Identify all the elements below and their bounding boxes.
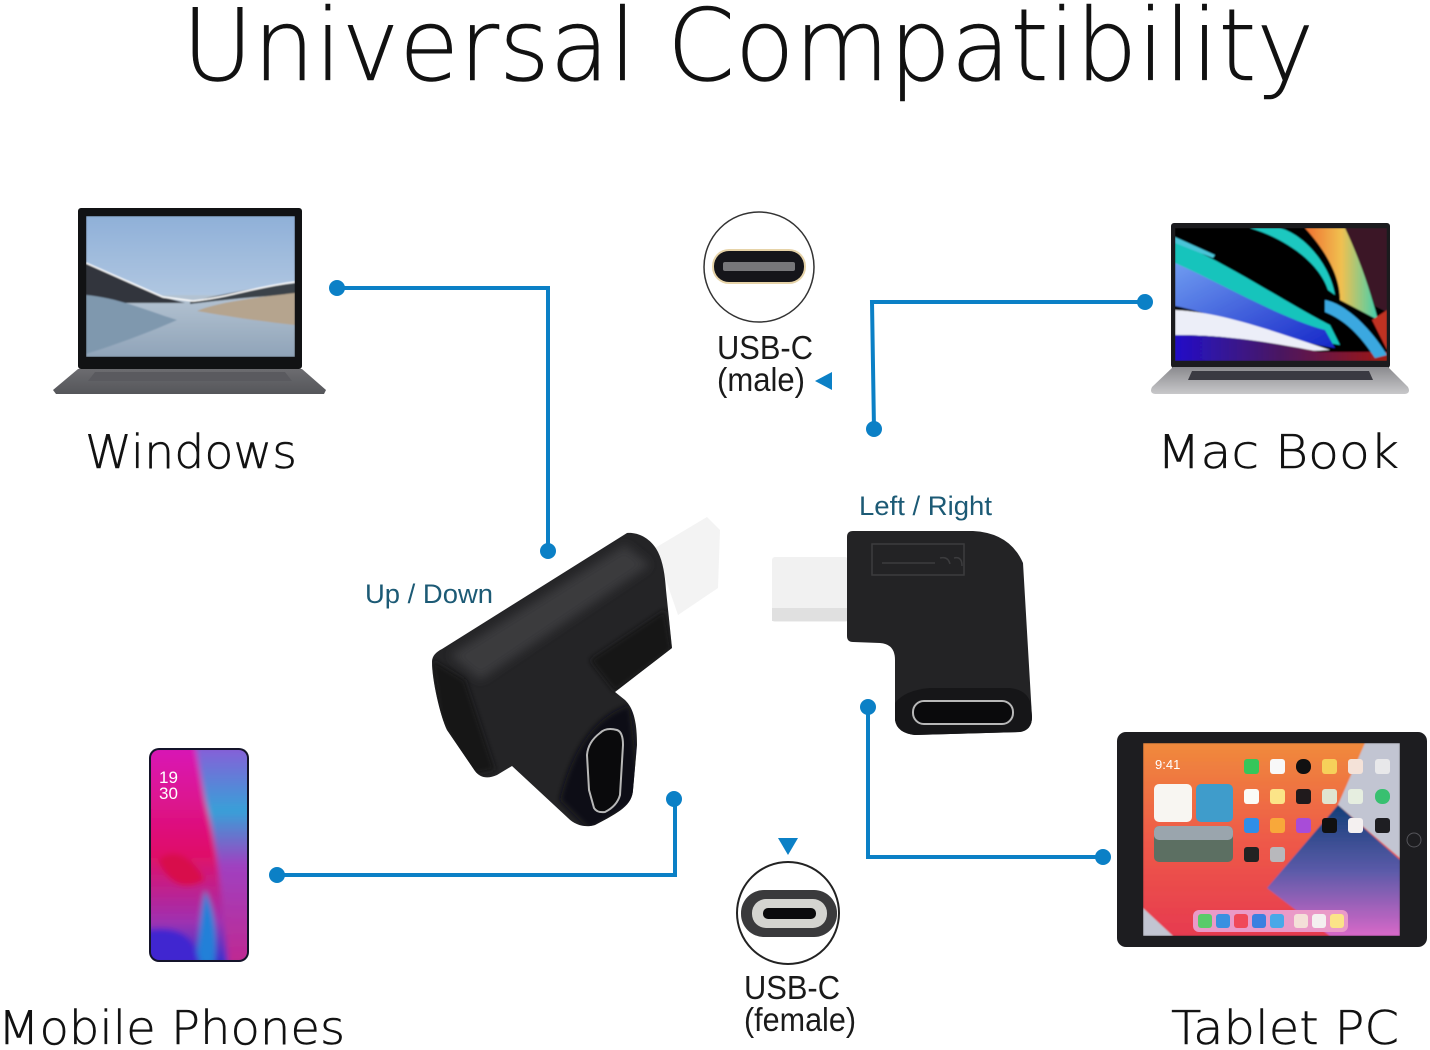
text: Up / Down: Up / Down xyxy=(365,579,493,609)
plug xyxy=(655,517,720,615)
device: mobile phone xyxy=(149,748,249,962)
label: Mac Book: Mac Book xyxy=(1157,425,1399,479)
clock: 9:41 xyxy=(1155,757,1180,772)
label: Windows: Windows xyxy=(85,425,297,479)
body shading xyxy=(432,545,672,830)
adapter: left/right angled xyxy=(772,531,1032,735)
icon: USB-C female port xyxy=(737,862,839,964)
USB-C male callout: (male) xyxy=(717,361,805,398)
embossed USB logo xyxy=(872,544,964,575)
macbook lid xyxy=(1171,223,1390,368)
body xyxy=(847,531,1032,735)
app icons xyxy=(1244,759,1390,862)
laptop keyboard deck xyxy=(53,369,326,394)
phone body xyxy=(149,748,249,962)
USB-C female callout xyxy=(737,838,856,1038)
text: Left / Right: Left / Right xyxy=(859,491,992,521)
body xyxy=(432,533,672,826)
device: mobile phone: 30 xyxy=(159,784,178,803)
adapter: up/down angled xyxy=(432,517,720,830)
home button xyxy=(1407,833,1421,847)
connector line: Windows xyxy=(329,280,556,559)
USB-C female callout: (female) xyxy=(744,1001,856,1038)
text: USB-C (male): USB-C xyxy=(717,329,813,366)
icon: USB-C male port xyxy=(704,212,814,322)
USB-C male callout xyxy=(704,212,832,398)
connector line: Mac Book xyxy=(866,294,1153,437)
macbook base xyxy=(1151,367,1409,394)
dock xyxy=(1193,910,1348,932)
arrow: pointing left xyxy=(815,372,832,390)
connector line: Tablet PC xyxy=(860,699,1111,865)
laptop screen landscape xyxy=(86,216,295,357)
macbook screen wallpaper xyxy=(1175,228,1387,361)
device: Mac Book xyxy=(1151,223,1409,394)
widgets xyxy=(1154,784,1233,862)
port xyxy=(913,701,1013,724)
tablet screen xyxy=(1143,743,1400,936)
plug xyxy=(772,557,848,622)
phone screen wallpaper xyxy=(151,750,247,960)
port xyxy=(587,729,623,812)
phone clock: 19 xyxy=(159,768,178,787)
device: Windows laptop xyxy=(53,208,326,394)
connector line: Mobile Phones xyxy=(269,791,682,883)
text: USB-C (female): USB-C xyxy=(744,969,840,1006)
arrow: pointing down xyxy=(778,838,798,855)
device: tablet xyxy=(1117,732,1427,947)
laptop lid xyxy=(78,208,302,369)
tablet body xyxy=(1117,732,1427,947)
